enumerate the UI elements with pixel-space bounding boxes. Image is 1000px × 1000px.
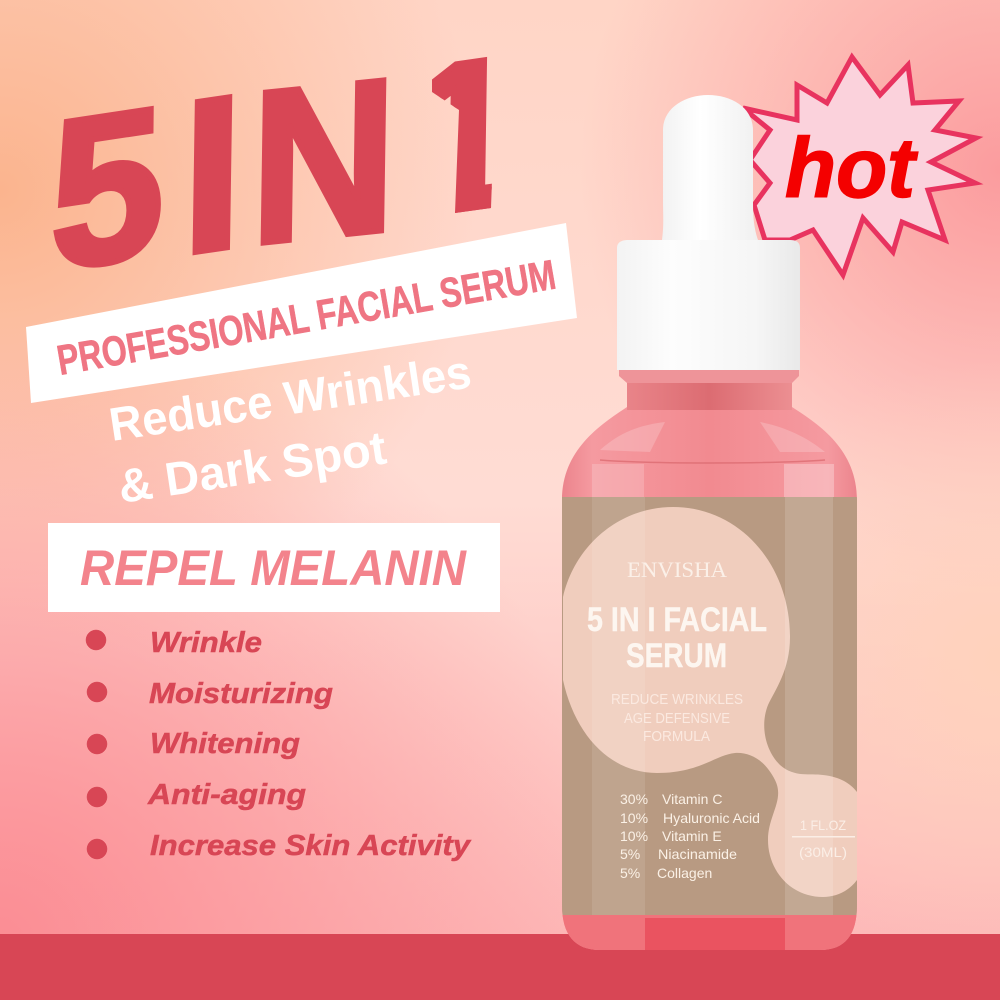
subheading: reduce wrinkles and dark spot: & Dark Spot xyxy=(115,421,390,513)
bullet: wrinkle: Wrinkle xyxy=(150,627,262,659)
title: 5IN1: N xyxy=(249,33,398,291)
ingredient list: 5% xyxy=(620,865,640,881)
bullet: anti-aging: Anti-aging xyxy=(147,779,306,811)
volume: 1 FL.OZ xyxy=(800,817,846,833)
subheading: reduce wrinkles and dark spot: Reduce Wrinkles xyxy=(106,345,474,451)
bullet: anti-aging xyxy=(87,779,306,811)
title: 5IN1 xyxy=(53,56,492,268)
product claim: AGE DEFENSIVE xyxy=(624,710,730,727)
benefits list xyxy=(86,627,472,862)
label blob xyxy=(563,507,857,897)
ingredient list: Vitamin E xyxy=(662,828,722,844)
product name: SERUM xyxy=(626,637,727,675)
panel: repel melanin xyxy=(48,523,500,612)
liquid base xyxy=(562,915,856,950)
hot text: hot xyxy=(785,121,918,215)
brand name: ENVISHA xyxy=(627,557,727,582)
product claim: REDUCE WRINKLES xyxy=(611,691,743,708)
product name xyxy=(587,601,767,675)
glass reflection bands xyxy=(592,497,833,915)
white ribbon: professional facial serum xyxy=(26,223,577,403)
ingredient list: Collagen xyxy=(657,865,712,881)
ingredient list: Vitamin C xyxy=(662,791,722,807)
product name: 5 IN I FACIAL xyxy=(587,601,767,639)
ingredient list: 10% xyxy=(620,810,648,826)
dropper cap collar xyxy=(617,240,800,370)
subheading: reduce wrinkles and dark spot xyxy=(106,345,474,513)
bullet: increase skin activity: Increase Skin Activity xyxy=(150,830,472,862)
bottom band xyxy=(0,934,1000,1000)
title: 5IN1: I xyxy=(180,49,245,301)
product bottle xyxy=(555,95,865,955)
bottle label xyxy=(560,497,860,915)
ingredient list: 30% xyxy=(620,791,648,807)
product claim: FORMULA xyxy=(643,728,710,745)
title: 5IN1: 1 xyxy=(400,8,525,269)
repel melanin heading: REPEL MELANIN xyxy=(80,540,467,596)
neck flange xyxy=(619,370,799,383)
bullet: whitening: Whitening xyxy=(150,728,300,760)
product claim xyxy=(611,691,743,745)
volume xyxy=(792,817,855,860)
ingredient list xyxy=(620,791,760,881)
bullet: whitening xyxy=(87,728,300,760)
dropper bulb xyxy=(662,95,758,240)
ingredient list: 10% xyxy=(620,828,648,844)
bottle glass xyxy=(555,375,865,955)
ingredient list: 5% xyxy=(620,846,640,862)
bullet: moisturizing xyxy=(87,678,333,710)
hot starburst badge xyxy=(743,57,976,275)
ingredient list: Hyaluronic Acid xyxy=(663,810,760,826)
title: 5IN1: 5 xyxy=(50,62,165,316)
ingredient list: Niacinamide xyxy=(658,846,737,862)
bullet: wrinkle xyxy=(86,627,262,659)
bullet: moisturizing: Moisturizing xyxy=(149,678,333,710)
volume: (30ML) xyxy=(799,844,847,860)
ribbon text: PROFESSIONAL FACIAL SERUM xyxy=(53,251,559,384)
